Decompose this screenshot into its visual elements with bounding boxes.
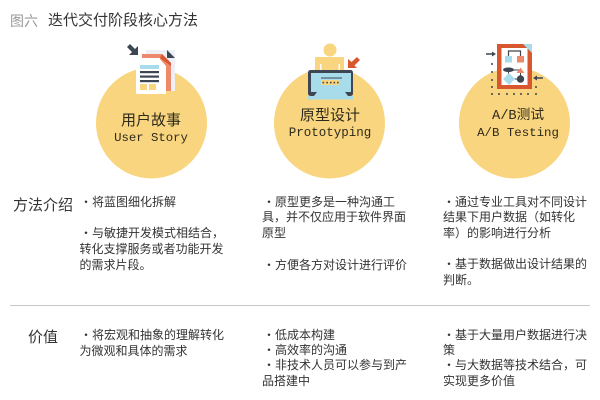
text: method col 2: ・原型更多是一种沟通工 — [263, 195, 395, 209]
circle label: prototyping — [289, 107, 371, 140]
text: method col 3: 判断。 — [443, 273, 479, 287]
text: value col 3: ・基于大量用户数据进行决 — [443, 328, 587, 342]
text: value col 3: 实现更多价值 — [443, 374, 515, 388]
text: method col 3: ・通过专业工具对不同设计 — [443, 195, 587, 209]
circle label: user story: 用户故事 — [121, 113, 181, 130]
text: method col 2: 具，并不仅应用于软件界面 — [262, 210, 406, 224]
circle label: A/B testing: A/B Testing — [477, 126, 559, 140]
icon: documents — [127, 44, 175, 94]
text: method col 1: 转化支撑服务或者功能开发 — [80, 242, 224, 256]
text: value col 2: ・低成本构建 — [263, 328, 335, 342]
text: method col 2: 原型 — [262, 226, 286, 240]
circle label: A/B testing — [477, 107, 559, 140]
text: method col 3: ・基于数据做出设计结果的 — [443, 257, 587, 271]
text: method col 1: ・与敏捷开发模式相结合， — [80, 226, 224, 240]
circle label: A/B testing: A/B测试 — [492, 109, 544, 124]
title: 图六 — [10, 13, 38, 29]
text: method col 1: 的需求片段。 — [80, 258, 152, 272]
text: value col 3: 策 — [443, 343, 455, 357]
circle label: prototyping: Prototyping — [289, 126, 371, 140]
text: method col 3: 结果下用户数据（如转化 — [443, 210, 575, 224]
row heading: method intro: 方法介绍 — [13, 197, 73, 214]
text: value col 2: ・高效率的沟通 — [263, 343, 347, 357]
circle: A/B testing — [459, 68, 570, 178]
circle: user story — [96, 68, 207, 178]
title: 迭代交付阶段核心方法 — [48, 12, 198, 29]
circle label: prototyping: 原型设计 — [300, 108, 360, 125]
circle: prototyping — [274, 68, 385, 178]
text: value col 2: ・非技术人员可以参与到产 — [263, 358, 407, 372]
text: method col 3: 率）的影响进行分析 — [443, 226, 551, 240]
row heading: value: 价值 — [28, 329, 58, 346]
icon: flowchart page — [486, 44, 543, 95]
icon: person with laptop — [308, 44, 360, 100]
text: method col 2: ・方便各方对设计进行评价 — [263, 258, 407, 272]
text: value col 3: ・与大数据等技术结合，可 — [443, 358, 587, 372]
circle label: user story — [114, 112, 188, 145]
divider — [10, 305, 590, 306]
text: value col 1: ・将宏观和抽象的理解转化 — [80, 328, 224, 342]
circle label: user story: User Story — [114, 131, 188, 145]
text: value col 2: 品搭建中 — [262, 374, 310, 388]
text: method col 1: ・将蓝图细化拆解 — [80, 195, 176, 209]
text: value col 1: 为微观和具体的需求 — [80, 344, 188, 358]
